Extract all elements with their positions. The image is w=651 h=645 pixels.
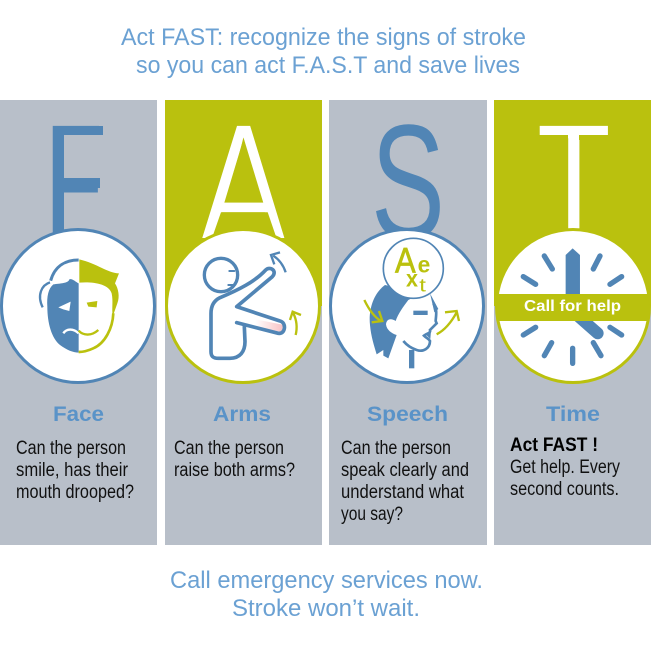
heading: face: Face [53, 403, 104, 426]
banner: call for help: Call for help [524, 298, 621, 315]
letters in bubble: e [418, 251, 430, 277]
text: speech description: you say? [341, 504, 403, 525]
heading: time: Time [546, 403, 600, 426]
panel: speech [329, 91, 487, 545]
banner: call for help [496, 294, 650, 321]
letters in bubble: x [406, 266, 418, 292]
text: speech description [341, 438, 469, 525]
icon: half sad half smiling face [40, 259, 119, 353]
letters in bubble [395, 241, 430, 296]
icon: head with letters [364, 238, 459, 368]
circle: speech [330, 230, 484, 382]
heading: speech: Speech [367, 403, 448, 426]
text: arms description: raise both arms? [174, 460, 295, 481]
letters in bubble: t [419, 275, 426, 296]
big letter F: F [45, 91, 103, 273]
circle: clock [496, 230, 650, 382]
heading: arms: Arms [213, 403, 271, 426]
text: time description: Get help. Every [510, 457, 620, 478]
big letter S: S [371, 91, 445, 273]
panel: arms [165, 91, 322, 545]
text: arms description: Can the person [174, 438, 284, 459]
icon: clock [523, 248, 622, 363]
text: arms description [174, 438, 295, 481]
text: face description: Can the person [16, 438, 126, 459]
panel: time [494, 91, 651, 545]
big letter A: A [202, 91, 285, 273]
text: face description [16, 438, 134, 503]
text: face description: smile, has their [16, 460, 129, 481]
text: speech description: speak clearly and [341, 460, 469, 481]
big letter T: T [537, 91, 611, 273]
text: face description: mouth drooped? [16, 482, 134, 503]
icon: person raising arms [204, 252, 301, 358]
title [121, 24, 526, 79]
text: time description [510, 435, 620, 500]
title: Act FAST: recognize the signs of stroke [121, 24, 526, 51]
closing message [170, 567, 483, 622]
title: so you can act F.A.S.T and save lives [136, 52, 520, 79]
circle: face [2, 230, 154, 382]
text: speech description: Can the person [341, 438, 451, 459]
text: speech description: understand what [341, 482, 465, 503]
circle: arms [166, 230, 320, 382]
text: time description: Act FAST ! [510, 435, 598, 456]
closing message: Call emergency services now. [170, 567, 483, 594]
letters in bubble: A [395, 241, 416, 280]
panel: face [0, 91, 157, 545]
text: time description: second counts. [510, 479, 619, 500]
closing message: Stroke won’t wait. [232, 595, 420, 622]
